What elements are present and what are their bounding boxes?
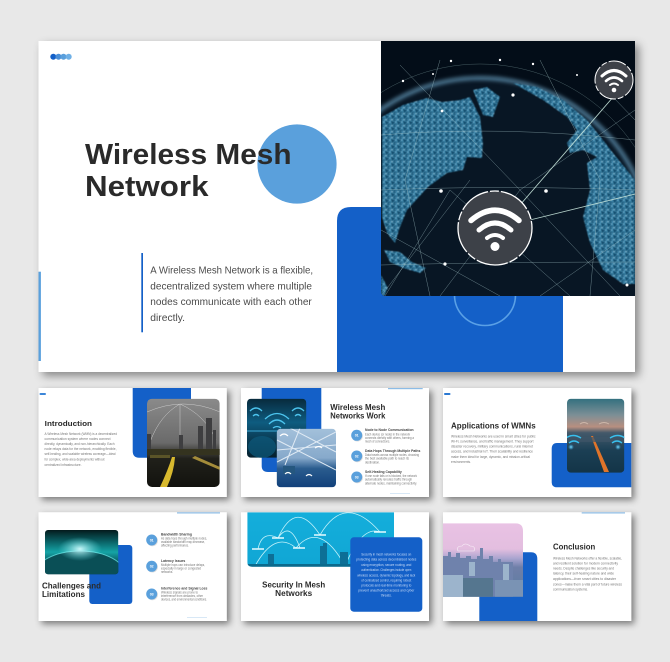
description text block — [141, 253, 313, 332]
heading: Limitations — [42, 590, 86, 599]
heading: Security In Mesh — [262, 580, 325, 589]
step 01: Each device (or node) in the network — [365, 432, 410, 436]
description text block: directly. — [150, 312, 185, 324]
body text: communication systems. — [553, 588, 588, 592]
blue text card — [350, 537, 422, 612]
body text: applications—from smart cities to disaster — [553, 577, 617, 581]
heading: Wireless Mesh — [330, 403, 386, 412]
blue text card: using encryption, secure routing, and — [361, 563, 411, 567]
body text: needs. Despite challenges like security and — [553, 566, 614, 570]
step 02: Data travels across multiple nodes, choosing — [365, 453, 419, 457]
city photo — [147, 399, 220, 487]
blue block — [133, 388, 191, 458]
city wifi photo — [566, 399, 625, 473]
cyan network photo — [247, 512, 394, 567]
panel: hero slide — [36, 39, 645, 382]
step 01: mesh of connections. — [365, 440, 390, 444]
blue text card: protocols and real-time monitoring to — [361, 584, 411, 588]
description text block: A Wireless Mesh Network is a flexible, — [150, 264, 313, 276]
panel: how networks work slide — [241, 388, 429, 497]
body text: communication system where nodes connect — [44, 437, 111, 441]
logo dots — [40, 393, 46, 395]
item 02: networks. — [161, 570, 173, 574]
panel: conclusion slide — [443, 512, 631, 621]
network photo — [277, 428, 336, 487]
body text: access, and industrial IoT. Their scalability and resilience — [451, 450, 533, 454]
panel: security slide — [241, 512, 429, 621]
wifi photo — [247, 399, 306, 458]
step 03: 03 — [355, 475, 359, 479]
heading: Introduction — [45, 419, 92, 428]
step 03: automatically reroutes traffic through — [365, 478, 412, 482]
body text: node relays data for the network, enabling flexible, — [44, 447, 117, 451]
skyline photo — [443, 523, 523, 600]
body text: A Wireless Mesh Network (WMN) is a decentralized — [44, 432, 117, 436]
item 01: affecting performance. — [161, 544, 189, 548]
heading: Networks Work — [330, 412, 386, 421]
step 01: 01 — [355, 434, 359, 438]
ring outline — [454, 264, 516, 326]
item 01: 01 — [150, 538, 154, 542]
item 02: Multiple hops can introduce delays, — [161, 563, 205, 567]
step 03: Self-Healing Capability — [365, 470, 402, 474]
item 03: interference from obstacles, other — [161, 594, 204, 598]
item 01 — [146, 532, 207, 548]
body text: latency, their self-healing nature and wide — [553, 572, 614, 576]
blue text card: Security in mesh networks focuses on — [361, 552, 411, 556]
teal earth photo — [45, 530, 118, 574]
blue text card: threats. — [381, 594, 392, 598]
body text: for complex, wide-area deployments without — [44, 458, 105, 462]
heading: Networks — [275, 589, 313, 598]
step 01: Node to Node Communication — [365, 428, 414, 432]
accents — [388, 388, 423, 494]
body text: zones—make them a vital part of future wireless — [553, 582, 622, 586]
icon: large wifi badge — [458, 191, 532, 265]
step 02: Data Hops Through Multiple Paths — [365, 449, 420, 453]
blue text card: prevent unauthorized access and cyber — [358, 588, 415, 592]
body text: and resilient solution for modern connectivity — [553, 562, 618, 566]
step 01 — [351, 428, 414, 444]
item 03: Wireless signals are prone to — [161, 590, 198, 594]
logo dots — [50, 54, 72, 60]
body text: centralized infrastructure. — [44, 463, 82, 467]
blue text card: of centralized control, requiring robust — [361, 578, 411, 582]
body text: Wireless Mesh Networks offer a flexible, scalable, — [553, 556, 622, 560]
body text: Wireless Mesh Networks are used in smart cities for public — [451, 434, 536, 438]
body text: make them ideal for large, dynamic, and mission-critical — [451, 455, 530, 459]
body text: disaster recovery, military communications, rural internet — [451, 444, 533, 448]
body text: Wi-Fi, surveillance, and traffic management. They support — [451, 440, 534, 444]
item 02 — [146, 559, 205, 574]
body text: directly, dynamically, and non-hierarchically. Each — [44, 442, 115, 446]
blue block — [337, 207, 563, 372]
blue text card: protecting data across decentralized nodes — [356, 558, 417, 562]
blue block — [552, 443, 631, 487]
blue text card: wireless access, dynamic topology, and lack — [357, 574, 416, 578]
logo dots — [444, 393, 450, 395]
step 02: 02 — [355, 454, 359, 458]
blue block — [479, 552, 537, 621]
step 03: If one node fails or is blocked, the network — [365, 474, 417, 478]
icon: small wifi badge — [595, 61, 633, 99]
item 02: 02 — [150, 565, 154, 569]
step 01: connects directly with others, forming a — [365, 436, 414, 440]
step 02: destination. — [365, 460, 380, 464]
title: Network — [85, 171, 209, 203]
item 02: Latency Issues — [161, 559, 185, 563]
heading: Challenges and — [42, 581, 101, 590]
accents — [177, 512, 220, 618]
step 03 — [351, 470, 417, 485]
accent — [582, 512, 625, 514]
panel: challenges slide — [34, 512, 227, 621]
heading: Conclusion — [553, 543, 596, 552]
step 02 — [351, 449, 420, 464]
step 02: the best available path to reach its — [365, 457, 409, 461]
panel: introduction slide — [38, 388, 227, 497]
item 03: Interference and Signal Loss — [161, 586, 207, 590]
blue block — [262, 388, 321, 472]
blue block — [89, 545, 132, 604]
item 03: devices, and environmental conditions. — [161, 598, 207, 602]
body text: environments. — [451, 460, 471, 464]
item 01: available bandwidth may decrease, — [161, 540, 205, 544]
description text block: nodes communicate with each other — [150, 296, 312, 308]
item 03: 03 — [150, 592, 154, 596]
decorative light-blue circle — [257, 124, 337, 204]
left accent bar — [38, 272, 41, 361]
item 03 — [146, 586, 207, 602]
panel: applications slide — [443, 388, 631, 497]
step 03: alternate nodes, maintaining connectivity. — [365, 481, 417, 485]
description text block: decentralized system where multiple — [150, 280, 312, 292]
item 01: As data hops through multiple nodes, — [161, 536, 207, 540]
item 02: especially in large or congested — [161, 566, 201, 570]
blue text card: authentication. Challenges include open — [361, 568, 411, 572]
title: Wireless Mesh — [85, 139, 292, 171]
heading: Applications of WMNs — [451, 421, 536, 430]
globe photo — [381, 41, 635, 296]
item 01: Bandwidth Sharing — [161, 532, 192, 536]
body text: self-healing, and scalable wireless coverage—ideal — [44, 452, 116, 456]
